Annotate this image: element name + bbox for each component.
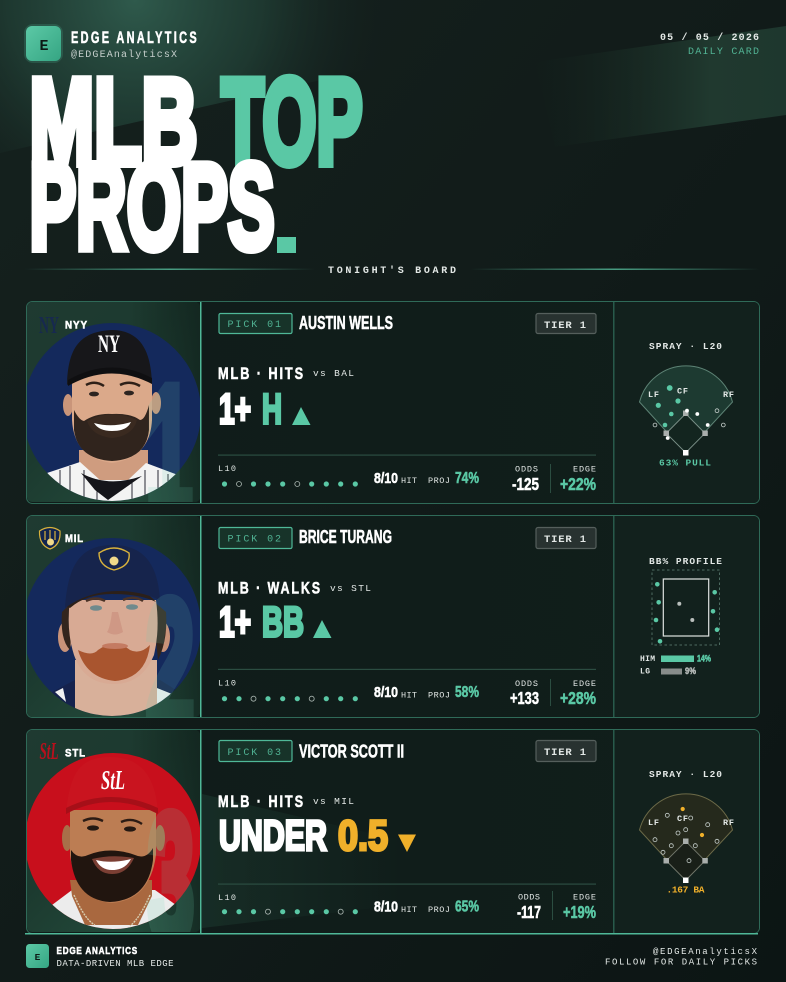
odds bbox=[512, 464, 539, 494]
header brand bbox=[24, 24, 199, 63]
footer handle: @EDGEAnalyticsX bbox=[653, 947, 758, 957]
odds: ODDS bbox=[515, 464, 538, 474]
spray chart: RF bbox=[723, 818, 734, 828]
panel: pick 03 card bbox=[26, 729, 760, 933]
hit rate and projection: 65% bbox=[455, 898, 479, 916]
section heading: tonight's board: TONIGHT'S BOARD bbox=[328, 265, 456, 277]
walk rate strike-zone chart bbox=[640, 556, 722, 677]
hit rate and projection: HIT bbox=[401, 905, 417, 915]
icon: Yankees logo: NY bbox=[39, 313, 59, 339]
icon: footer logo bbox=[26, 944, 49, 968]
edge: EDGE bbox=[573, 892, 596, 902]
tier badge: TIER 1 bbox=[544, 747, 586, 759]
L10 hit tracker bbox=[218, 893, 358, 914]
market label: vs MIL bbox=[313, 796, 354, 807]
prop line: BB bbox=[262, 598, 304, 646]
player name: AUSTIN WELLS bbox=[299, 313, 393, 333]
spray chart: SPRAY · L20 bbox=[649, 341, 722, 352]
hit rate and projection bbox=[374, 684, 479, 701]
pick badge bbox=[219, 740, 292, 762]
hit rate and projection: 58% bbox=[455, 684, 479, 701]
player panel: 2 bbox=[146, 564, 194, 765]
spray chart: LF bbox=[648, 818, 659, 828]
title: TOP bbox=[222, 54, 362, 190]
prop line bbox=[219, 598, 332, 646]
tier badge: TIER 1 bbox=[544, 320, 586, 332]
hit rate and projection: 74% bbox=[455, 470, 479, 487]
spray chart bbox=[640, 769, 734, 896]
prop line: 0.5 bbox=[338, 812, 388, 860]
odds: -117 bbox=[517, 902, 541, 922]
hit rate and projection bbox=[374, 470, 479, 487]
player name: BRICE TURANG bbox=[299, 527, 392, 547]
hit rate and projection: PROJ bbox=[428, 476, 450, 486]
team code: NYY bbox=[65, 320, 88, 332]
spray chart: 63% PULL bbox=[659, 458, 711, 468]
L10 hit tracker: L10 bbox=[218, 464, 236, 474]
spray chart: .167 BA bbox=[666, 884, 705, 896]
market label: MLB · HITS bbox=[218, 793, 305, 811]
edge bbox=[560, 464, 596, 494]
tier badge bbox=[536, 314, 596, 334]
tier badge bbox=[536, 740, 596, 762]
panel: pick 01 card bbox=[26, 301, 760, 504]
footer brand: EDGE ANALYTICS bbox=[56, 945, 138, 957]
player panel: 3 bbox=[148, 778, 194, 979]
market label: vs BAL bbox=[313, 368, 354, 379]
icon: brand logo: E bbox=[39, 38, 49, 55]
player photo: Brice Turang bbox=[52, 545, 176, 720]
player panel: 1 bbox=[146, 350, 192, 551]
title: PROPS bbox=[30, 138, 274, 274]
market label: vs STL bbox=[330, 583, 371, 594]
footer tagline: DATA-DRIVEN MLB EDGE bbox=[56, 959, 174, 969]
odds bbox=[517, 892, 541, 922]
player photo: Austin Wells bbox=[47, 330, 178, 510]
odds bbox=[510, 679, 539, 708]
pick badge bbox=[219, 528, 292, 548]
prop line: 1+ bbox=[219, 598, 251, 646]
market label: MLB · HITS bbox=[218, 365, 305, 383]
prop line: 1+ bbox=[219, 386, 251, 434]
edge: EDGE bbox=[573, 679, 596, 689]
L10 hit tracker: L10 bbox=[218, 678, 236, 688]
daily card label: DAILY CARD bbox=[688, 47, 759, 58]
spray chart: RF bbox=[723, 390, 734, 400]
walk rate strike-zone chart: 9% bbox=[685, 666, 696, 677]
spray chart: SPRAY · L20 bbox=[649, 769, 722, 780]
edge bbox=[560, 679, 596, 708]
brand name: EDGE ANALYTICS bbox=[71, 29, 199, 47]
spray chart: LF bbox=[648, 390, 659, 400]
hit rate and projection: HIT bbox=[401, 690, 417, 700]
pick badge bbox=[219, 314, 292, 334]
player panel bbox=[27, 302, 200, 502]
walk rate strike-zone chart: HIM bbox=[640, 655, 655, 664]
footer call to action: FOLLOW FOR DAILY PICKS bbox=[605, 958, 757, 968]
pick badge: PICK 02 bbox=[228, 534, 281, 546]
hit rate and projection: PROJ bbox=[428, 905, 450, 915]
player photo: Victor Scott II bbox=[52, 771, 174, 929]
walk rate strike-zone chart: 14% bbox=[697, 654, 711, 664]
L10 hit tracker bbox=[218, 464, 358, 487]
icon: NY cap logo: NY bbox=[98, 331, 120, 358]
date block bbox=[660, 32, 759, 58]
market label: MLB · WALKS bbox=[218, 580, 322, 598]
prop line bbox=[219, 386, 310, 434]
tier badge: TIER 1 bbox=[544, 534, 586, 546]
spray chart: CF bbox=[677, 814, 688, 824]
hit rate and projection: 8/10 bbox=[374, 898, 398, 916]
tier badge bbox=[536, 528, 596, 548]
pick badge: PICK 01 bbox=[228, 320, 281, 331]
icon: footer logo: E bbox=[35, 952, 41, 963]
hit rate and projection: 8/10 bbox=[374, 470, 398, 487]
team code: STL bbox=[65, 748, 86, 760]
title: MLB bbox=[30, 54, 198, 190]
edge: EDGE bbox=[573, 464, 596, 474]
player panel bbox=[27, 516, 200, 717]
hit rate and projection: HIT bbox=[401, 476, 417, 486]
walk rate strike-zone chart: BB% PROFILE bbox=[649, 556, 722, 567]
icon: Cardinals logo: StL bbox=[40, 739, 58, 765]
L10 hit tracker bbox=[218, 678, 358, 701]
title bbox=[30, 54, 362, 274]
player name: VICTOR SCOTT II bbox=[299, 742, 404, 762]
odds: +133 bbox=[510, 688, 539, 708]
edge: +22% bbox=[560, 474, 596, 494]
icon: Brewers cap logo bbox=[99, 548, 129, 570]
edge: +19% bbox=[563, 902, 596, 922]
panel: pick 02 card bbox=[26, 515, 760, 718]
edge bbox=[563, 892, 596, 922]
odds: -125 bbox=[512, 474, 539, 494]
date: 05 / 05 / 2026 bbox=[660, 32, 759, 44]
L10 hit tracker: L10 bbox=[218, 893, 236, 903]
walk rate strike-zone chart: LG bbox=[640, 668, 650, 676]
footer bbox=[25, 933, 758, 969]
hit rate and projection: 8/10 bbox=[374, 684, 398, 701]
team code: MIL bbox=[65, 533, 84, 545]
icon: brand logo bbox=[24, 24, 63, 63]
spray chart: CF bbox=[677, 386, 688, 396]
player panel bbox=[27, 730, 200, 932]
icon: Brewers logo bbox=[39, 528, 60, 549]
hit rate and projection: PROJ bbox=[428, 690, 450, 700]
brand handle: @EDGEAnalyticsX bbox=[71, 49, 177, 61]
prop line: UNDER bbox=[219, 812, 327, 860]
icon: Cardinals cap logo: StL bbox=[101, 765, 125, 795]
hit rate and projection bbox=[374, 898, 479, 916]
odds: ODDS bbox=[515, 679, 538, 689]
spray chart bbox=[640, 341, 734, 468]
prop line: H bbox=[262, 386, 282, 434]
odds: ODDS bbox=[518, 892, 540, 902]
edge: +28% bbox=[560, 688, 596, 708]
pick badge: PICK 03 bbox=[228, 748, 281, 759]
